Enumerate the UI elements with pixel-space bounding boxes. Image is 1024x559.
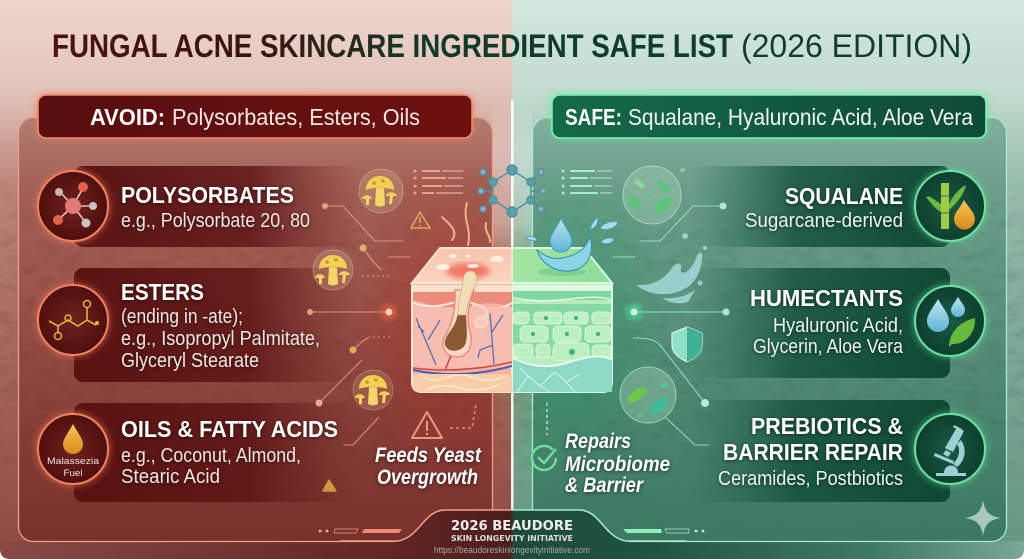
row text: esters — [121, 279, 320, 372]
callout: repairs microbiome and barrier: Microbiome — [565, 453, 670, 476]
right connector lines — [547, 202, 730, 445]
icon: polysorbate molecule — [38, 171, 108, 241]
row text: squalane — [745, 183, 903, 232]
row: polysorbates — [38, 166, 359, 247]
row: humectants — [690, 268, 985, 378]
safe header — [552, 95, 986, 138]
row text: oils: e.g., Coconut, Almond, — [121, 445, 301, 467]
row: prebiotics and barrier repair — [690, 400, 985, 502]
icon: water droplet and splash — [526, 217, 618, 271]
avoid header — [38, 95, 472, 138]
icon: shield — [672, 327, 702, 362]
icon: ester structure — [38, 285, 108, 355]
row text: esters: (ending in -ate); — [121, 306, 243, 328]
row text: humectants: Hyaluronic Acid, — [773, 315, 903, 337]
icon: microscope — [915, 414, 985, 484]
row text: prebiotics: Ceramides, Postbiotics — [718, 468, 903, 490]
row text: prebiotics: BARRIER REPAIR — [723, 439, 903, 465]
row text: oils: Stearic Acid — [121, 466, 220, 488]
callout: repairs microbiome and barrier: & Barrier — [565, 474, 645, 497]
callout: repairs microbiome and barrier: Repairs — [565, 430, 631, 453]
row text: polysorbates: POLYSORBATES — [121, 182, 294, 208]
footer badge — [340, 510, 686, 559]
row text: oils: OILS & FATTY ACIDS — [121, 416, 338, 442]
row: oils and fatty acids — [38, 403, 359, 502]
icon: water drops and leaf — [915, 286, 985, 356]
icon: oil drop malassezia fuel: Malassezia — [47, 456, 100, 467]
avoid header: AVOID: — [90, 104, 165, 130]
safe header: SAFE: — [565, 104, 622, 130]
skin cross-section: inflamed half — [412, 248, 512, 392]
row text: squalane: SQUALANE — [785, 183, 903, 209]
row text: esters: e.g., Isopropyl Palmitate, — [121, 328, 320, 350]
row text: squalane: Sugarcane-derived — [745, 210, 903, 232]
icon: sugarcane and oil drop — [915, 171, 985, 241]
callout: feeds yeast overgrowth: Feeds Yeast — [375, 444, 482, 467]
row text: humectants — [750, 285, 904, 358]
icon: oil drop malassezia fuel — [38, 414, 108, 484]
row: esters — [38, 268, 359, 382]
left connector lines — [307, 203, 476, 445]
icon: bacteria bubble top — [623, 166, 685, 224]
data line lists — [414, 170, 612, 194]
icon: small gold triangle — [323, 480, 336, 491]
title: (2026 EDITION) — [741, 28, 972, 64]
icon: check circle — [532, 446, 556, 470]
decorative footer bars — [318, 529, 704, 533]
icon: warning triangle — [412, 412, 442, 438]
safe header: Squalane, Hyaluronic Acid, Aloe Vera — [628, 104, 973, 130]
footer badge: 2026 BEAUDORE — [451, 519, 573, 534]
panel: avoid — [18, 95, 492, 542]
row text: prebiotics: PREBIOTICS & — [751, 413, 903, 439]
row text: prebiotics — [718, 413, 903, 490]
icon: bacteria bubble bottom — [620, 367, 676, 423]
icons: mushrooms in bubbles — [313, 169, 403, 410]
callout: feeds yeast overgrowth: Overgrowth — [377, 466, 478, 489]
callout: repairs microbiome and barrier — [532, 430, 670, 497]
footer badge: SKIN LONGEVITY INITIATIVE — [451, 534, 573, 543]
row text: esters: ESTERS — [121, 279, 204, 305]
row text: oils — [121, 416, 338, 488]
avoid header: Polysorbates, Esters, Oils — [172, 104, 420, 130]
icon: small warning triangle — [411, 212, 430, 228]
icon: heat wisps — [442, 203, 490, 245]
row text: esters: Glyceryl Stearate — [121, 350, 259, 372]
icon: side water splash — [636, 233, 707, 303]
row: squalane — [690, 166, 985, 247]
row text: polysorbates: e.g., Polysorbate 20, 80 — [121, 210, 310, 232]
row text: humectants: HUMECTANTS — [750, 285, 903, 311]
footer badge: https://beaudoreskinlongevityinitiative.com — [434, 545, 590, 555]
icon: sparkle star — [965, 500, 1001, 536]
title: FUNGAL ACNE SKINCARE INGREDIENT SAFE LIST — [52, 28, 733, 64]
callout: feeds yeast overgrowth — [375, 412, 482, 489]
center divider — [511, 100, 514, 515]
row text: humectants: Glycerin, Aloe Vera — [753, 336, 904, 358]
skin cross-section: healthy half — [512, 248, 612, 392]
icon: central molecule — [478, 165, 546, 217]
panel: safe — [532, 95, 1006, 542]
icon: oil drop malassezia fuel: Fuel — [64, 468, 82, 479]
row text: polysorbates — [121, 182, 310, 232]
